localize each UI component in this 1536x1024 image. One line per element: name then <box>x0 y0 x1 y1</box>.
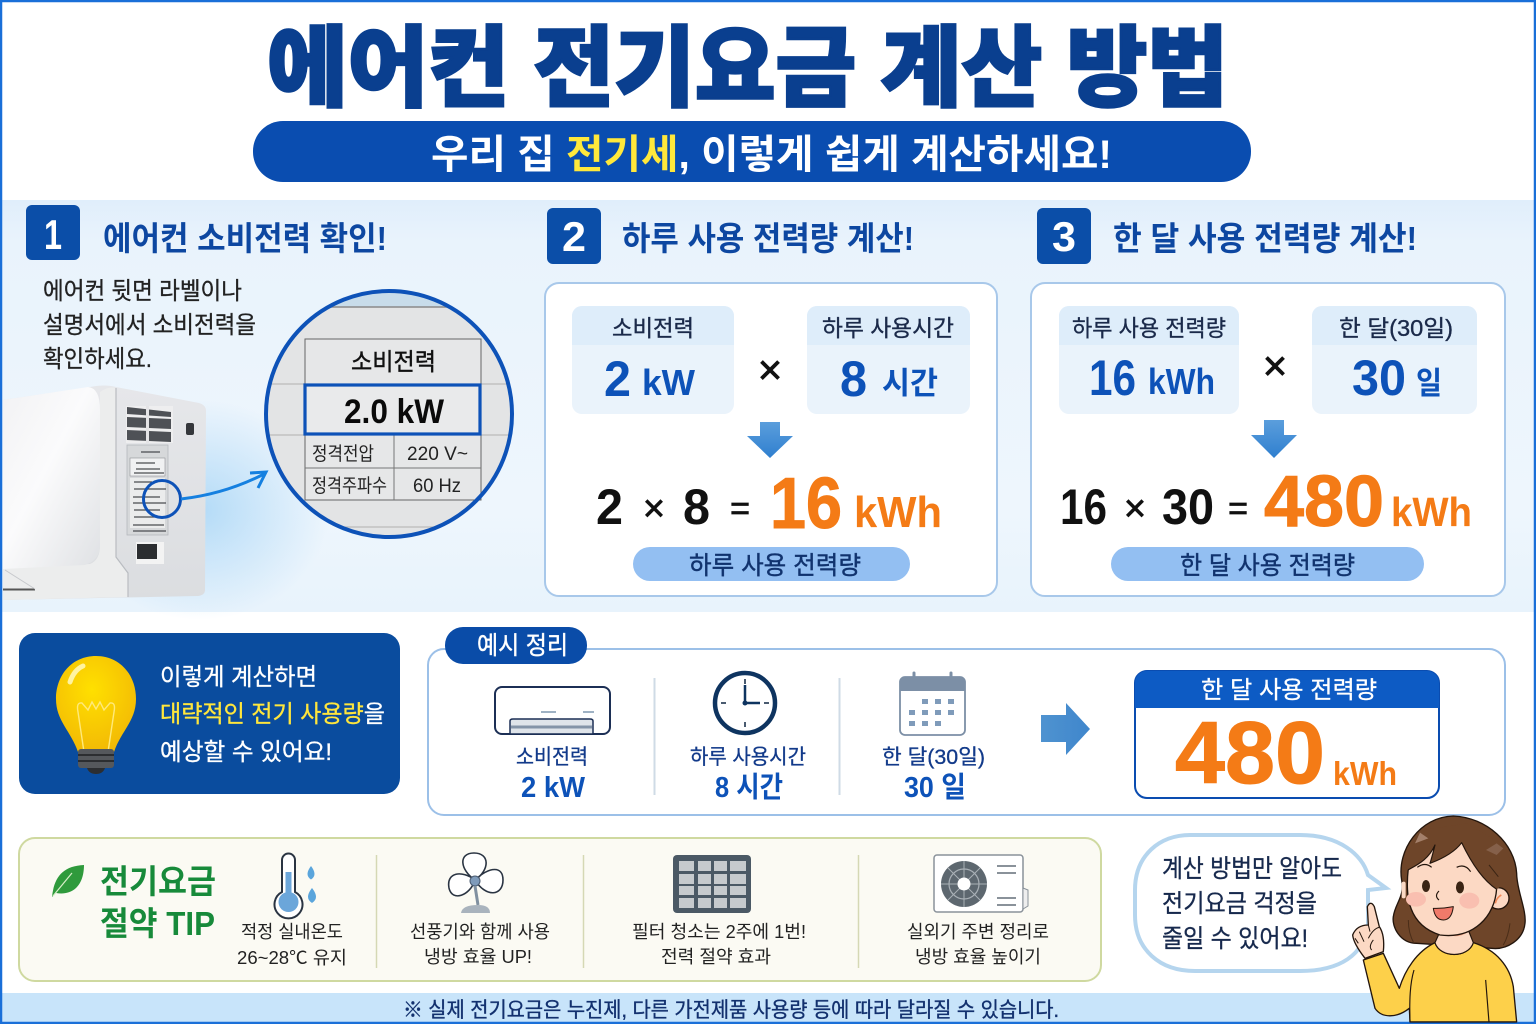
value: days: 30 일 <box>904 771 966 804</box>
box: days <box>1312 306 1477 414</box>
caption pill: 한 달 사용 전력량 <box>1180 552 1355 580</box>
tip: fan: 냉방 효율 UP! <box>424 947 532 967</box>
box: power: 소비전력 <box>612 315 694 341</box>
box: days: 일 <box>1416 366 1442 401</box>
caption pill: 하루 사용 전력량 <box>689 552 861 580</box>
multiply sign: × <box>758 346 782 393</box>
result box: kWh <box>1333 755 1397 792</box>
step 3 heading <box>1037 208 1417 264</box>
box: hours: 하루 사용시간 <box>822 315 954 341</box>
result box: 480 <box>1175 703 1325 802</box>
equation result <box>596 464 942 544</box>
box: days: 30 <box>1352 350 1406 406</box>
step 1 instruction text: 에어컨 뒷면 라벨이나 <box>43 278 242 305</box>
step 1 heading: 에어컨 소비전력 확인! <box>103 220 387 257</box>
magnified label: 정격주파수 <box>312 475 387 497</box>
footnote: ※ 실제 전기요금은 누진제, 다른 가전제품 사용량 등에 따라 달라질 수 있습니다. <box>403 999 1059 1022</box>
icon: light bulb <box>56 656 136 774</box>
tip: fan: 선풍기와 함께 사용 <box>410 922 550 942</box>
equation result: 16 <box>770 464 842 544</box>
box: power <box>572 306 734 414</box>
box: power: kW <box>642 362 695 403</box>
tips heading: 전기요금 <box>100 863 216 900</box>
step 2 heading: 하루 사용 전력량 계산! <box>622 220 914 257</box>
equation result: kWh <box>854 488 942 537</box>
label: days: 한 달(30일) <box>882 746 985 769</box>
magnified label: 정격전압 <box>312 443 374 465</box>
equation result: 8 <box>683 479 710 535</box>
step 2 heading <box>547 208 914 264</box>
icon: air conditioner <box>495 687 610 734</box>
tip: outdoor unit <box>907 855 1049 967</box>
tip: outdoor unit: 실외기 주변 정리로 <box>907 922 1049 942</box>
box: hours: 8 <box>840 351 867 407</box>
equation result <box>1060 462 1472 542</box>
multiply sign: × <box>1263 342 1287 389</box>
equation result: × <box>643 488 665 530</box>
value: power: 2 kW <box>521 772 586 804</box>
tab: example summary: 예시 정리 <box>477 632 568 660</box>
box: days: 한 달(30일) <box>1339 315 1453 341</box>
panel: step 2 <box>545 283 997 596</box>
box: daily energy: 하루 사용 전력량 <box>1072 315 1226 341</box>
tips heading: 절약 TIP <box>100 905 215 942</box>
box: hours: 시간 <box>882 366 938 401</box>
arrow to result <box>1041 703 1090 755</box>
character: woman pointing <box>1353 816 1525 1022</box>
tip: temperature <box>237 854 347 968</box>
icon: calendar <box>900 673 965 735</box>
step 1 instruction text: 확인하세요. <box>43 346 152 373</box>
panel: estimate callout: 예상할 수 있어요! <box>160 739 332 766</box>
arrow to magnifier <box>181 472 266 499</box>
tip: fan <box>410 853 550 967</box>
result box <box>1135 671 1439 802</box>
subtitle banner <box>253 121 1251 182</box>
equation result: 16 <box>1060 479 1107 535</box>
equation result: 480 <box>1264 462 1384 542</box>
step 3 heading: 한 달 사용 전력량 계산! <box>1113 220 1417 257</box>
magnified label <box>262 290 516 537</box>
down arrow <box>1251 420 1297 458</box>
speech bubble: 계산 방법만 알아도 <box>1162 855 1342 883</box>
step 1 instruction text: 설명서에서 소비전력을 <box>43 312 256 339</box>
tip: filter: 필터 청소는 2주에 1번! <box>632 922 806 942</box>
panel: step 3 <box>1031 283 1505 596</box>
caption pill <box>1111 547 1424 581</box>
panel: saving tips <box>19 838 1101 981</box>
magnified label: 소비전력 <box>351 349 436 376</box>
panel: worked example <box>428 627 1505 815</box>
icon: leaf <box>52 865 84 897</box>
step 3 heading: 3 <box>1052 213 1076 260</box>
equation result: = <box>730 490 750 528</box>
speech bubble: 전기요금 걱정을 <box>1162 890 1317 918</box>
magnified label: 2.0 kW <box>344 393 445 431</box>
box: daily energy: 16 <box>1089 350 1136 406</box>
title: 에어컨 전기요금 계산 방법 <box>267 0 1228 125</box>
step 1 heading <box>26 205 387 260</box>
tip: filter: 전력 절약 효과 <box>661 947 771 967</box>
box: power: 2 <box>604 351 631 407</box>
equation result: × <box>1124 488 1146 530</box>
box: daily energy <box>1059 306 1239 414</box>
equation result: 2 <box>596 479 623 535</box>
equation result: 30 <box>1162 479 1214 535</box>
tips heading <box>100 863 216 942</box>
label: power: 소비전력 <box>516 746 588 769</box>
panel: estimate callout <box>19 633 400 794</box>
panel: estimate callout: 대략적인 전기 사용량을 <box>160 701 385 728</box>
equation result: = <box>1228 490 1248 528</box>
speech bubble <box>1135 835 1386 971</box>
speech bubble: 줄일 수 있어요! <box>1162 925 1308 953</box>
box: hours <box>807 306 970 414</box>
caption pill <box>633 547 910 581</box>
tip: temperature: 26~28℃ 유지 <box>237 948 347 968</box>
box: daily energy: kWh <box>1148 361 1215 402</box>
tip: filter <box>632 855 806 967</box>
magnified label: 220 V~ <box>407 444 468 465</box>
step 2 heading: 2 <box>562 213 586 260</box>
tip: outdoor unit: 냉방 효율 높이기 <box>915 947 1041 967</box>
tab: example summary <box>445 627 587 664</box>
step 1 instruction text <box>43 278 256 373</box>
step 1 heading: 1 <box>44 211 62 258</box>
result box: 한 달 사용 전력량 <box>1201 677 1377 704</box>
down arrow <box>747 422 793 458</box>
subtitle banner: 우리 집 전기세, 이렇게 쉽게 계산하세요! <box>431 133 1112 177</box>
tip: temperature: 적정 실내온도 <box>241 922 343 942</box>
equation result: kWh <box>1391 489 1472 535</box>
value: hours: 8 시간 <box>715 771 783 804</box>
label: hours: 하루 사용시간 <box>690 746 806 769</box>
magnified label: 60 Hz <box>413 476 461 497</box>
panel: estimate callout: 이렇게 계산하면 <box>160 664 317 691</box>
icon: clock <box>715 673 775 733</box>
air conditioner back photo <box>3 386 206 600</box>
